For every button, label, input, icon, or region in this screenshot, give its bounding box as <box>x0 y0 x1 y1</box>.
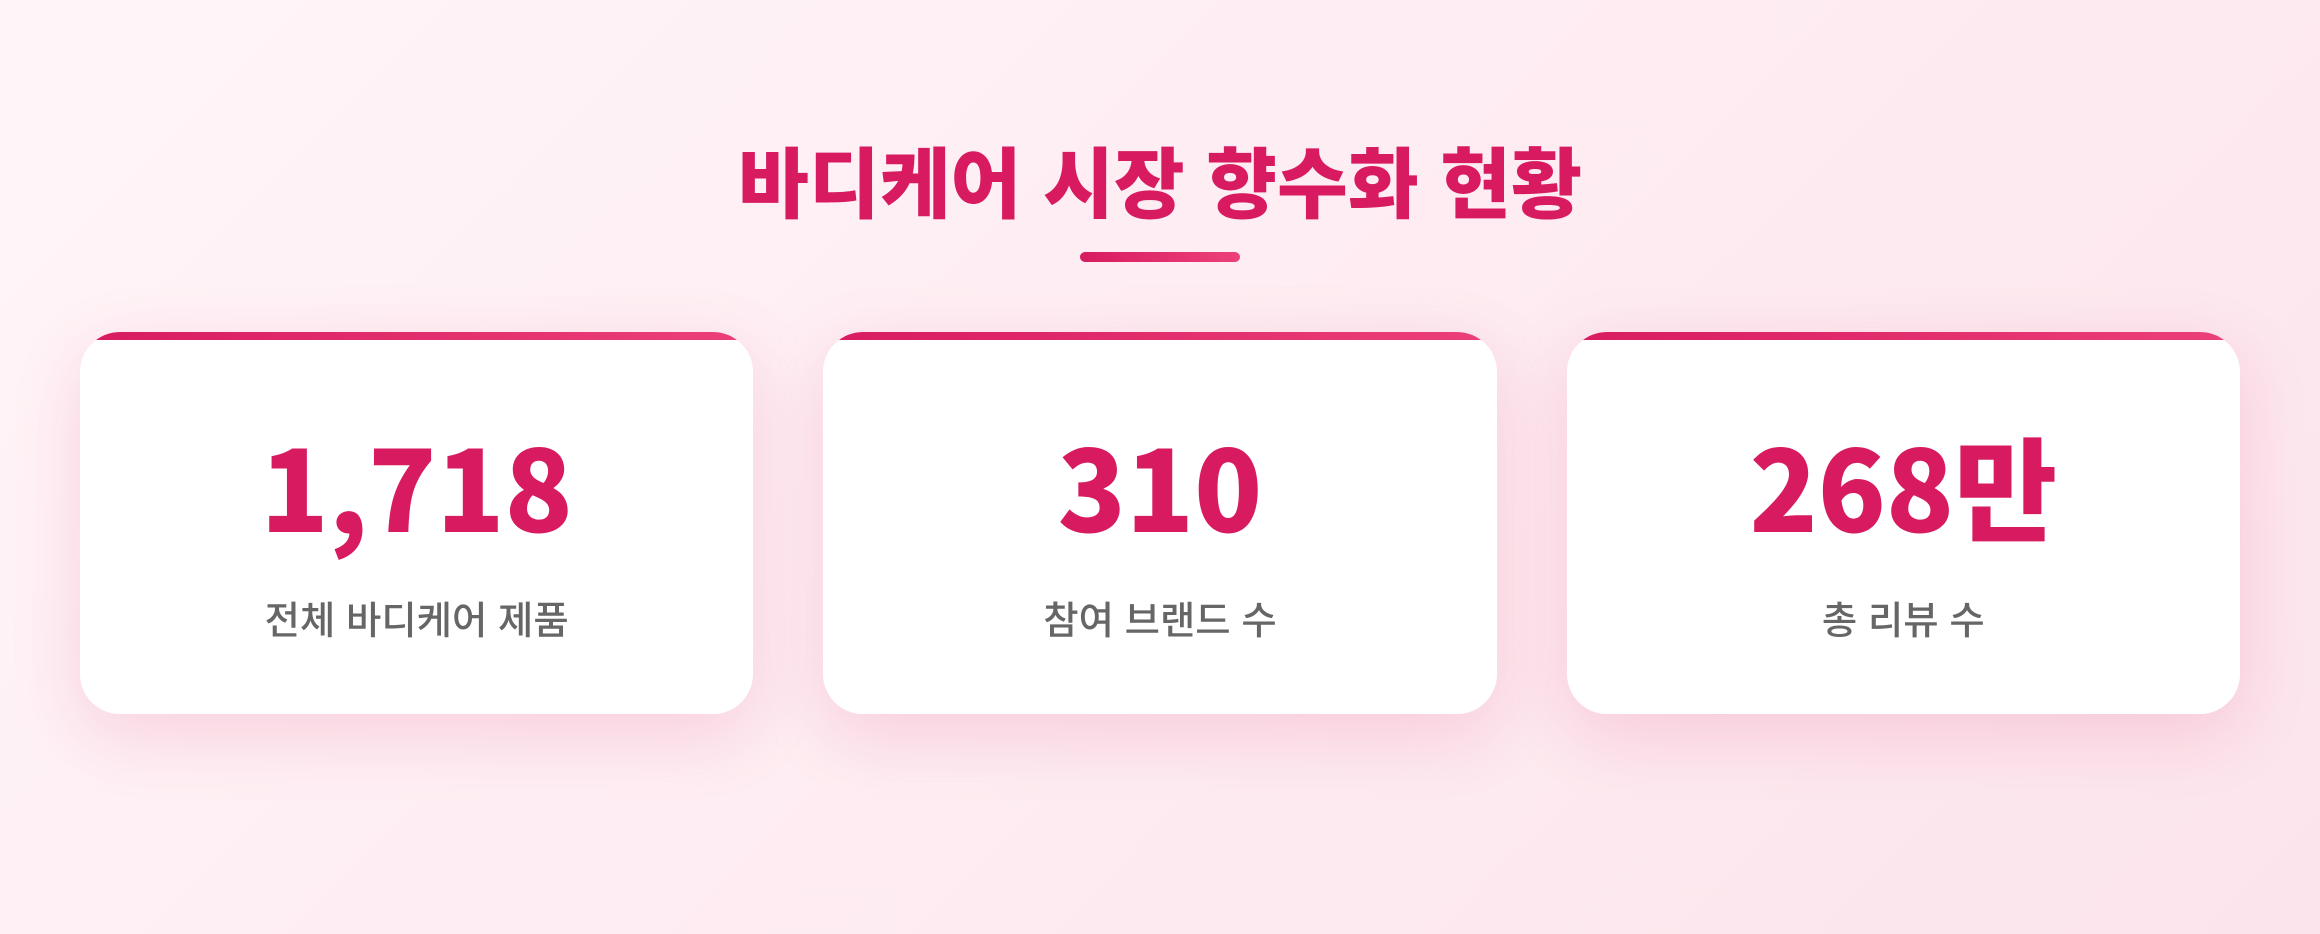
stat label: reviews: 총 리뷰 수 <box>1822 590 1985 646</box>
stat number: reviews: 268만 <box>1749 403 2057 565</box>
stat label: brands: 참여 브랜드 수 <box>1043 590 1277 646</box>
panel: brands <box>823 332 1497 714</box>
panel: total products <box>80 332 753 714</box>
stat label: products: 전체 바디케어 제품 <box>265 590 569 646</box>
stat number: products: 1,718 <box>260 403 573 565</box>
card top accent bar <box>823 332 1497 340</box>
card top accent bar <box>80 332 753 340</box>
panel: reviews <box>1567 332 2240 714</box>
title underline accent <box>1080 252 1240 262</box>
stat number: brands: 310 <box>1058 403 1262 565</box>
title: 바디케어 시장 향수화 현황 <box>738 124 1582 235</box>
card top accent bar <box>1567 332 2240 340</box>
